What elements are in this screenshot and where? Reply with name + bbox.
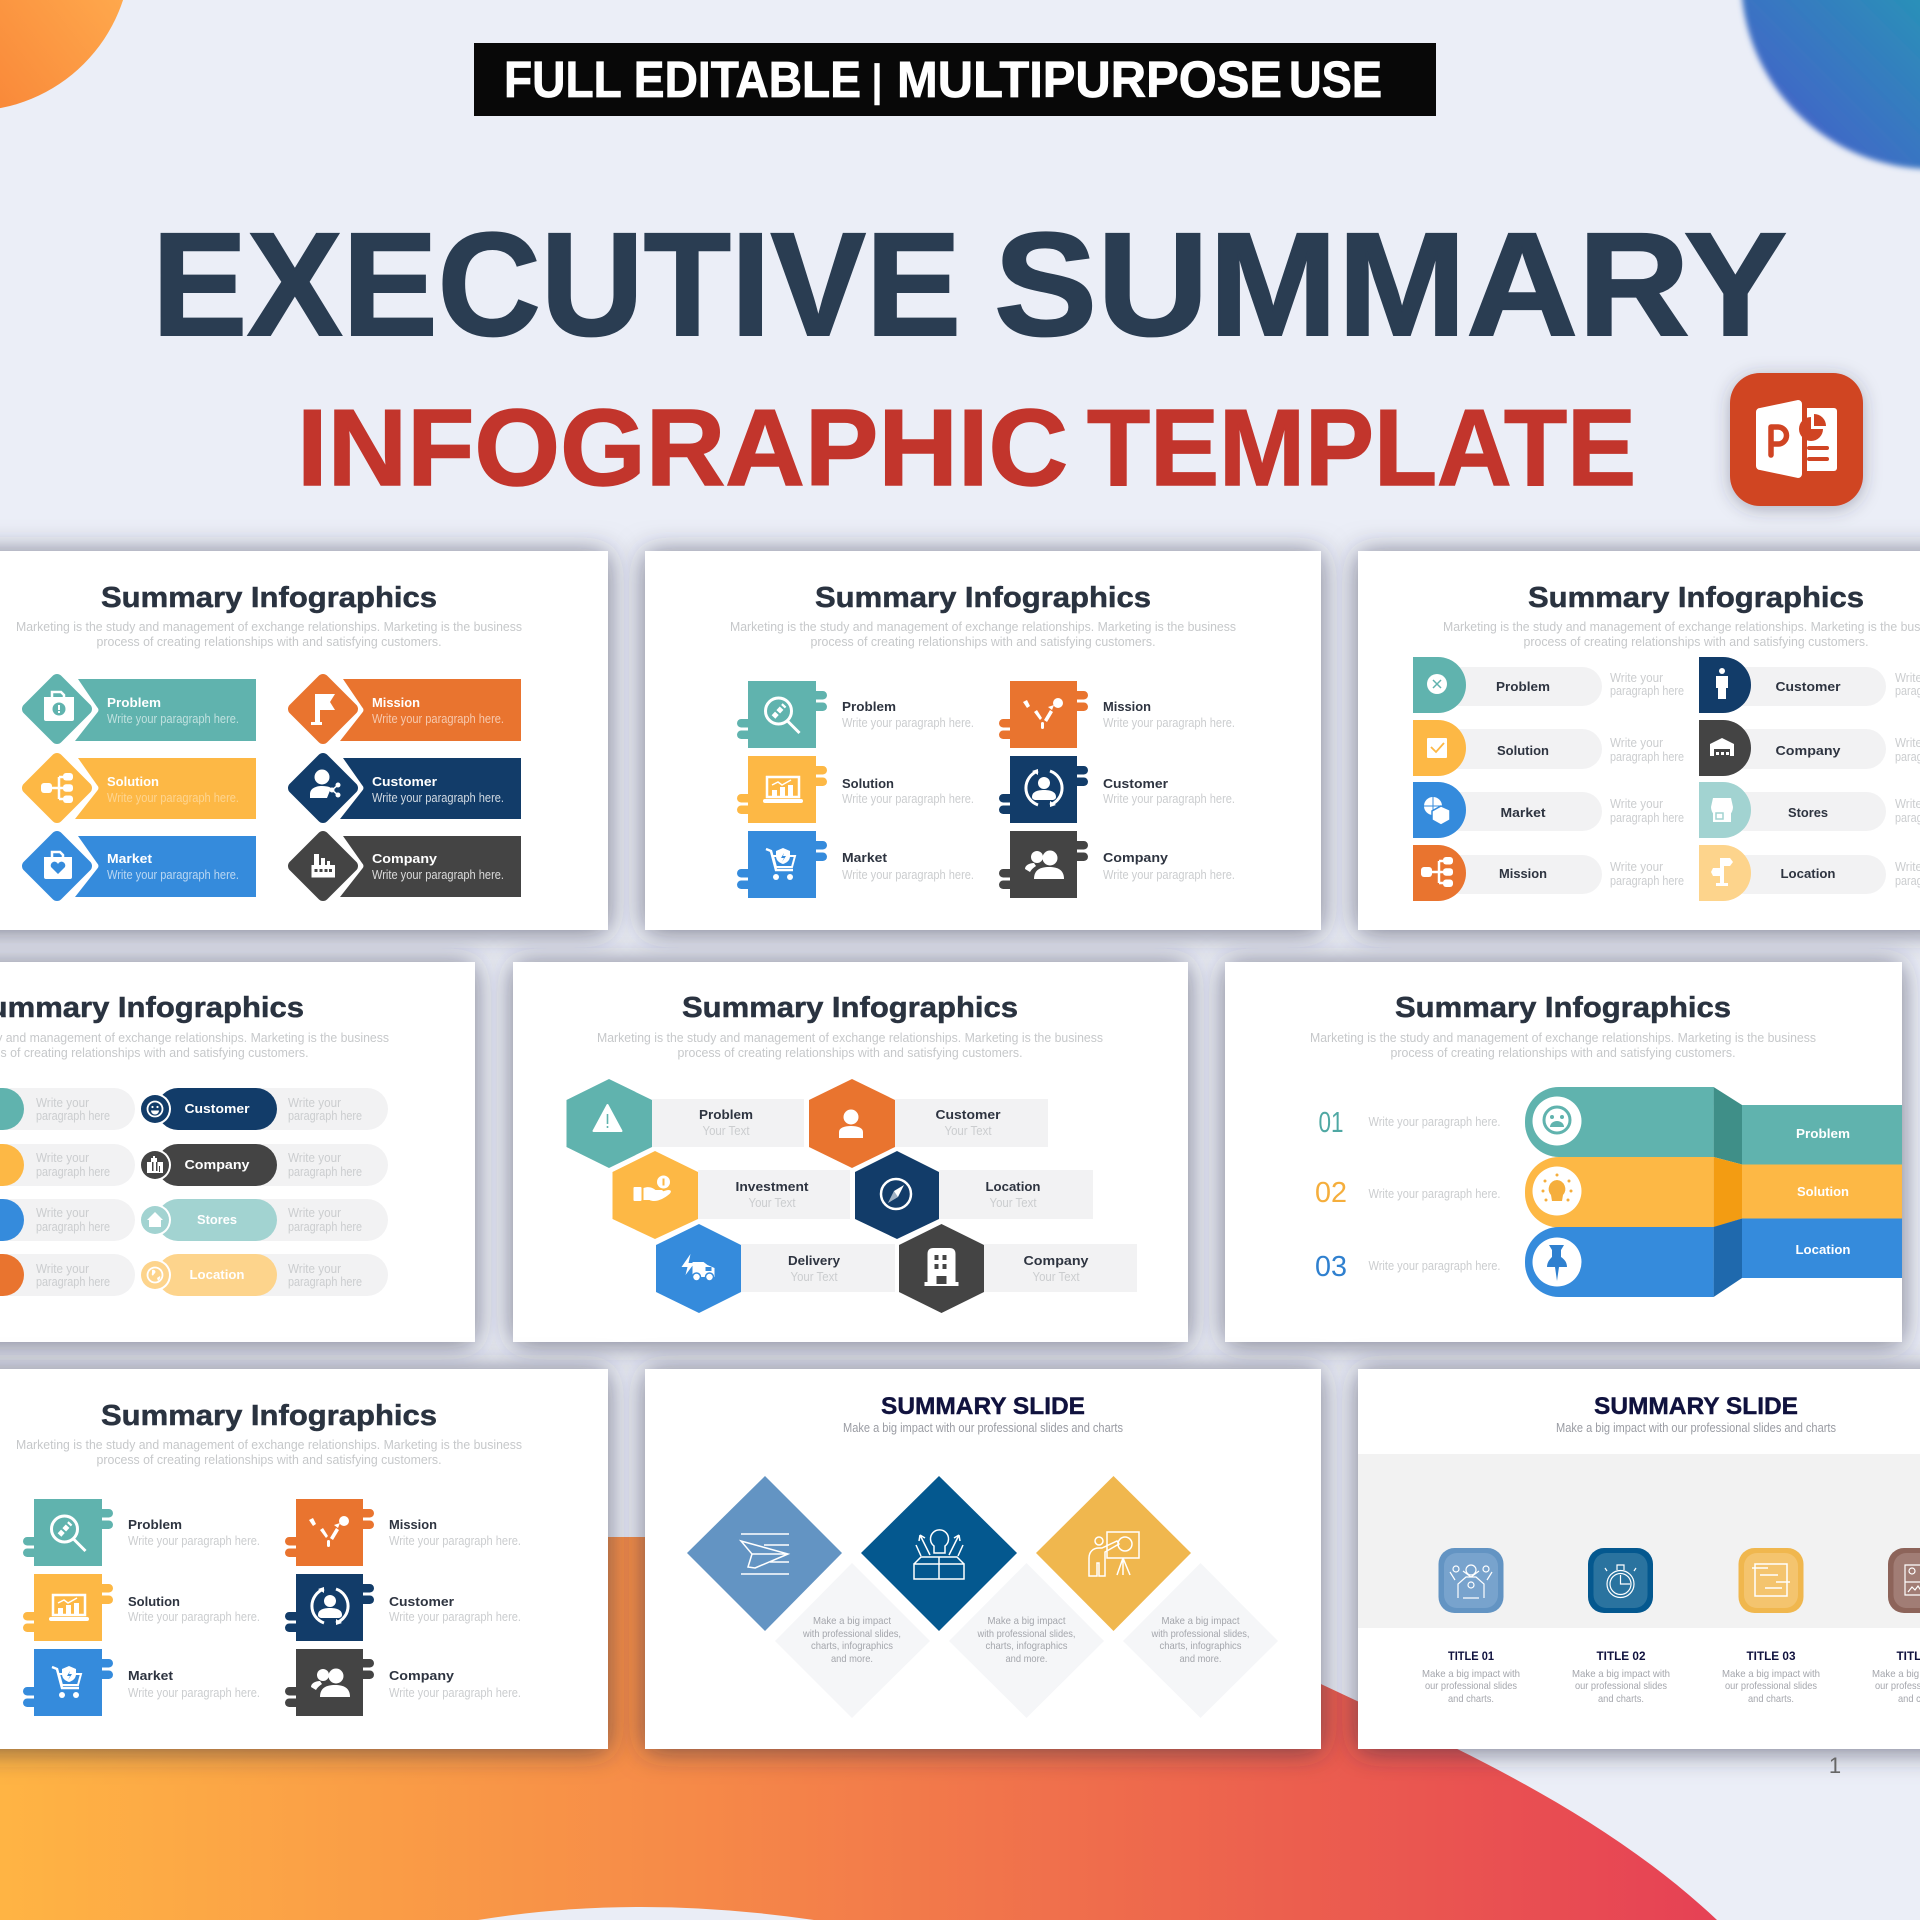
- item: Market: Market: [107, 851, 153, 866]
- slide description: [597, 1030, 1103, 1060]
- item: Location: paragraph here: [288, 1275, 362, 1289]
- item: Location: Location: [1780, 866, 1836, 881]
- main title: SUMMARY: [994, 203, 1787, 367]
- row 03 text: [1315, 1251, 1500, 1283]
- item: Problem: Problem: [699, 1107, 753, 1122]
- item: Customer: [809, 1079, 1048, 1168]
- item: Problem: Write your: [1610, 671, 1663, 685]
- item: Market: Write your paragraph here.: [128, 1686, 260, 1700]
- panel: slide 7 puzzle blocks: [0, 1369, 608, 1749]
- item: Market: Write your: [1610, 797, 1663, 811]
- item: Problem: Problem: [1496, 679, 1550, 694]
- header banner: USE: [1289, 51, 1382, 108]
- item: Delivery: Your Text: [790, 1270, 838, 1284]
- item: Location: [855, 1151, 1093, 1239]
- text diamond 2: [949, 1563, 1104, 1718]
- item: Mission: Write your paragraph here.: [372, 712, 504, 726]
- slide description: process of creating relationships with and satisfying customers.: [96, 634, 442, 649]
- item: Customer: Customer: [389, 1594, 454, 1609]
- item: Customer: Your Text: [944, 1124, 992, 1138]
- left column row 2: [0, 1144, 135, 1186]
- row 01 text: 01: [1318, 1107, 1344, 1139]
- panel: slide 2 puzzle blocks: [645, 551, 1321, 930]
- item: Market: paragraph here: [1610, 811, 1684, 825]
- item: Customer: [285, 1574, 521, 1641]
- slide description: Marketing is the study and management of exchange relationships. Marketing is the business: [16, 619, 522, 634]
- text diamond 3: [1123, 1563, 1278, 1718]
- item: Company: [285, 1649, 521, 1716]
- column 01 text: TITLE 01: [1448, 1651, 1495, 1663]
- column 02 text: our professional slides: [1575, 1680, 1667, 1692]
- item: Company: Write your: [288, 1151, 341, 1165]
- row 02 text: [1315, 1177, 1500, 1209]
- panel: slide 5 hexagons: [513, 962, 1188, 1342]
- text diamond 1: and more.: [831, 1653, 873, 1665]
- slide description: process of creating relationships with and satisfying customers.: [96, 1452, 442, 1467]
- subtitle: TEMPLATE: [1087, 387, 1636, 509]
- slide description: Marketing is the study and management of exchange relationships. Marketing is the business: [597, 1030, 1103, 1045]
- item: Market: Market: [1500, 805, 1546, 820]
- item: Problem: Problem: [107, 695, 161, 710]
- row 03 text: Write your paragraph here.: [1368, 1259, 1500, 1273]
- slide heading: Summary Infographics: [101, 582, 437, 614]
- main title: [152, 203, 1787, 367]
- slide heading: Summary Infographics: [682, 992, 1018, 1024]
- column 02 text: [1572, 1651, 1670, 1705]
- header banner: FULL EDITABLE: [504, 51, 861, 108]
- subtitle: INFOGRAPHIC: [297, 387, 1068, 509]
- item: Problem: [566, 1079, 804, 1168]
- page number: 1: [1829, 1753, 1841, 1778]
- left column row 3: Write your: [36, 1206, 89, 1220]
- item: Company: Company: [389, 1668, 455, 1683]
- item: Market: [737, 831, 974, 898]
- item: Company: [999, 831, 1235, 898]
- item: Problem: [737, 681, 974, 748]
- item: Company: Company: [1776, 743, 1841, 758]
- item: Market: [1413, 782, 1684, 838]
- column 02 text: and charts.: [1598, 1693, 1644, 1705]
- item: Problem: paragraph here: [1610, 684, 1684, 698]
- slide description: Marketing is the study and management of exchange relationships. Marketing is the business: [730, 619, 1236, 634]
- column 03 text: our professional slides: [1725, 1680, 1817, 1692]
- panel: slide 3 D-shaped tabs: [1358, 551, 1920, 930]
- row 02 text: Write your paragraph here.: [1368, 1187, 1500, 1201]
- item: Problem: Write your paragraph here.: [842, 716, 974, 730]
- slide description: [16, 619, 522, 649]
- item: Customer: Write your paragraph here.: [372, 791, 504, 805]
- panel: slide 4 pills: [0, 962, 475, 1342]
- item: Company: Company: [1103, 850, 1169, 865]
- item: Mission: [285, 1499, 521, 1566]
- item: Mission: [294, 679, 521, 741]
- item: Solution: [737, 756, 974, 823]
- text diamond 3: Make a big impact: [1162, 1615, 1240, 1627]
- item: Stores: Write your: [288, 1206, 341, 1220]
- item: Problem: Write your paragraph here.: [107, 712, 239, 726]
- item: Problem: [28, 679, 256, 741]
- slide description: Marketing is the study and management of exchange relationships. Marketing is the business: [16, 1437, 522, 1452]
- item: Problem: [1413, 657, 1684, 713]
- decorative gradient wave, bottom: [0, 1537, 1717, 1920]
- slide heading: Summary Infographics: [815, 582, 1151, 614]
- item: Location: [1699, 845, 1920, 901]
- item: Market: Market: [128, 1668, 174, 1683]
- decorative blue circle, top right: [1741, 0, 1920, 169]
- ribbon: Solution: Solution: [1797, 1184, 1849, 1199]
- item: Delivery: Delivery: [788, 1253, 841, 1268]
- left column row 1: [0, 1088, 135, 1130]
- text diamond 1: charts, infographics: [811, 1640, 893, 1652]
- left column row 4: Write your: [36, 1262, 89, 1276]
- slide heading: Summary Infographics: [1395, 992, 1731, 1024]
- text diamond 1: with professional slides,: [802, 1628, 901, 1640]
- item: Solution: paragraph here: [1610, 750, 1684, 764]
- item: Market: Write your paragraph here.: [842, 868, 974, 882]
- item: Solution: [28, 758, 256, 819]
- slide heading: Summary Infographics: [1528, 582, 1864, 614]
- item: Location: Your Text: [990, 1196, 1037, 1210]
- header banner: [474, 43, 1436, 116]
- slide description: [16, 1437, 522, 1467]
- panel: slide 9 summary tiles: [1358, 1369, 1920, 1749]
- item: Company: Your Text: [1032, 1270, 1080, 1284]
- item: Investment: Your Text: [748, 1196, 796, 1210]
- column 01 text: [1422, 1651, 1520, 1705]
- item: Market: Market: [842, 850, 888, 865]
- item: Mission: Mission: [389, 1517, 437, 1532]
- item: Company: [139, 1144, 388, 1186]
- panel: slide 1 diamonds: [0, 551, 608, 930]
- item: Solution: Solution: [1497, 743, 1549, 758]
- column 01 text: our professional slides: [1425, 1680, 1517, 1692]
- ribbon: Solution: [1525, 1157, 1902, 1228]
- item: Mission: Write your paragraph here.: [389, 1534, 521, 1548]
- item: Location: [139, 1254, 388, 1296]
- item: Delivery: [656, 1224, 895, 1313]
- item: Solution: Write your: [1610, 736, 1663, 750]
- slide heading: SUMMARY SLIDE: [881, 1393, 1085, 1420]
- text diamond 1: [775, 1563, 930, 1718]
- slide description: Marketing is the study and management of exchange relationships. Marketing is the business: [1310, 1030, 1816, 1045]
- column 04 text: [1872, 1651, 1920, 1705]
- grey band: [1358, 1454, 1920, 1628]
- item: Customer: Write your: [288, 1096, 341, 1110]
- item: Stores: [1699, 782, 1920, 838]
- item: Mission: [999, 681, 1235, 748]
- text diamond 3: with professional slides,: [1151, 1628, 1250, 1640]
- item: Mission: Mission: [1103, 699, 1151, 714]
- column 01 text: Make a big impact with: [1422, 1668, 1520, 1680]
- item: Company: paragraph here: [288, 1165, 362, 1179]
- item: Solution: Write your paragraph here.: [107, 791, 239, 805]
- row 01 text: [1318, 1107, 1500, 1139]
- item: Mission: [1413, 845, 1684, 901]
- row 03 text: 03: [1315, 1251, 1347, 1283]
- text diamond 2: and more.: [1006, 1653, 1048, 1665]
- item: Solution: Write your paragraph here.: [842, 792, 974, 806]
- text diamond 3: charts, infographics: [1160, 1640, 1242, 1652]
- item: Customer: [294, 758, 521, 819]
- column 01 text: and charts.: [1448, 1693, 1494, 1705]
- navy diamond with idea box icon: [861, 1476, 1017, 1631]
- text diamond 2: with professional slides,: [977, 1628, 1076, 1640]
- item: Stores: paragraph here: [288, 1220, 362, 1234]
- slide description: [1310, 1030, 1816, 1060]
- left column row 3: paragraph here: [36, 1220, 110, 1234]
- item: Solution: [1413, 720, 1684, 776]
- item: Solution: Write your paragraph here.: [128, 1610, 260, 1624]
- item: Investment: Investment: [736, 1179, 809, 1194]
- item: Customer: Write your paragraph here.: [389, 1610, 521, 1624]
- slide description: process of creating relationships with and satisfying customers.: [1524, 634, 1868, 649]
- item: Mission: Write your paragraph here.: [1103, 716, 1235, 730]
- item: Problem: Problem: [842, 699, 896, 714]
- tile 01: [1438, 1548, 1504, 1613]
- item: Company: Company: [184, 1157, 250, 1172]
- item: Mission: Mission: [372, 695, 420, 710]
- tile 03: [1738, 1548, 1804, 1613]
- item: Solution: Solution: [107, 774, 159, 789]
- item: Problem: Your Text: [702, 1124, 750, 1138]
- left column row 4: [0, 1254, 135, 1296]
- ribbon: Location: [1525, 1218, 1902, 1297]
- row 01 text: Write your paragraph here.: [1368, 1115, 1500, 1129]
- item: Problem: [23, 1499, 260, 1566]
- item: Location: Location: [986, 1179, 1041, 1194]
- column 02 text: TITLE 02: [1596, 1651, 1646, 1663]
- left column row 2: paragraph here: [36, 1165, 110, 1179]
- header banner: |: [872, 56, 882, 106]
- tile 04: [1888, 1548, 1920, 1613]
- item: Customer: Customer: [936, 1107, 1000, 1122]
- slide description: [1443, 619, 1920, 649]
- left column row 2: Write your: [36, 1151, 89, 1165]
- slide description: Make a big impact with our professional slides and charts: [1556, 1421, 1836, 1435]
- item: Location: Write your: [288, 1262, 341, 1276]
- item: Customer: Write your paragraph here.: [1103, 792, 1235, 806]
- item: Company: Write your paragraph here.: [372, 868, 504, 882]
- item: Customer: Customer: [1103, 776, 1168, 791]
- item: Customer: [139, 1088, 388, 1130]
- item: Customer: [999, 756, 1235, 823]
- text diamond 3: and more.: [1180, 1653, 1222, 1665]
- slide heading: Summary Infographics: [101, 1400, 437, 1432]
- item: Solution: Solution: [128, 1594, 180, 1609]
- blue diamond with paper plane icon: [687, 1476, 842, 1631]
- item: Company: Write your paragraph here.: [389, 1686, 521, 1700]
- slide description: [0, 1030, 389, 1060]
- decorative orange circle, top left: [0, 0, 131, 111]
- text diamond 2: charts, infographics: [986, 1640, 1068, 1652]
- slide description: process of creating relationships with and satisfying customers.: [678, 1045, 1022, 1060]
- item: Company: [1699, 720, 1920, 776]
- item: Company: Company: [372, 851, 438, 866]
- ribbon: Location: Location: [1796, 1242, 1851, 1257]
- text diamond 1: Make a big impact: [813, 1615, 891, 1627]
- header banner: MULTIPURPOSE: [897, 51, 1282, 108]
- tile 02: [1588, 1548, 1653, 1613]
- panel: slide 8 summary diamonds: [645, 1369, 1321, 1749]
- item: Solution: [23, 1574, 260, 1641]
- column 03 text: TITLE 03: [1746, 1651, 1796, 1663]
- item: Market: [23, 1649, 260, 1716]
- slide description: Make a big impact with our professional slides and charts: [843, 1421, 1123, 1435]
- item: Mission: paragraph here: [1610, 874, 1684, 888]
- item: Location: Location: [190, 1267, 245, 1282]
- item: Customer: Customer: [372, 774, 437, 789]
- item: Customer: Customer: [184, 1101, 250, 1116]
- item: Customer: paragraph here: [288, 1109, 362, 1123]
- item: Solution: Solution: [842, 776, 894, 791]
- ribbon: Problem: Problem: [1796, 1126, 1850, 1141]
- slide description: [730, 619, 1236, 649]
- slide description: process of creating relationships with and satisfying customers.: [1390, 1045, 1736, 1060]
- item: Company: [899, 1224, 1137, 1313]
- item: Stores: Stores: [1788, 805, 1828, 820]
- left column row 4: paragraph here: [36, 1275, 110, 1289]
- column 03 text: and charts.: [1748, 1693, 1794, 1705]
- text diamond 2: Make a big impact: [988, 1615, 1066, 1627]
- item: Mission: Mission: [1499, 866, 1547, 881]
- row 02 text: 02: [1315, 1177, 1347, 1209]
- item: Market: Write your paragraph here.: [107, 868, 239, 882]
- yellow diamond with presenter icon: [1036, 1476, 1191, 1631]
- main title: EXECUTIVE: [152, 203, 961, 367]
- item: Customer: Customer: [1776, 679, 1840, 694]
- item: Customer: [1699, 657, 1920, 713]
- item: Market: [28, 836, 256, 897]
- item: Mission: Write your: [1610, 860, 1663, 874]
- item: Stores: [139, 1199, 388, 1241]
- left column row 1: paragraph here: [36, 1109, 110, 1123]
- left column row 1: Write your: [36, 1096, 89, 1110]
- slide heading: SUMMARY SLIDE: [1594, 1393, 1798, 1420]
- item: Problem: Write your paragraph here.: [128, 1534, 260, 1548]
- item: Company: Write your paragraph here.: [1103, 868, 1235, 882]
- item: Investment: [612, 1151, 850, 1239]
- panel: slide 6 stacked ribbons: [1225, 962, 1902, 1342]
- item: Problem: Problem: [128, 1517, 182, 1532]
- column 03 text: Make a big impact with: [1722, 1668, 1820, 1680]
- slide description: process of creating relationships with and satisfying customers.: [810, 634, 1156, 649]
- ribbon: Problem: [1525, 1087, 1902, 1165]
- column 03 text: [1722, 1651, 1820, 1705]
- column 02 text: Make a big impact with: [1572, 1668, 1670, 1680]
- left column row 3: [0, 1199, 135, 1241]
- icon: PowerPoint logo: [1730, 373, 1863, 506]
- bottom notch curve: [478, 1907, 814, 1920]
- subtitle: [297, 387, 1636, 509]
- item: Company: Company: [1024, 1253, 1089, 1268]
- item: Company: [294, 836, 521, 897]
- item: Stores: Stores: [197, 1212, 237, 1227]
